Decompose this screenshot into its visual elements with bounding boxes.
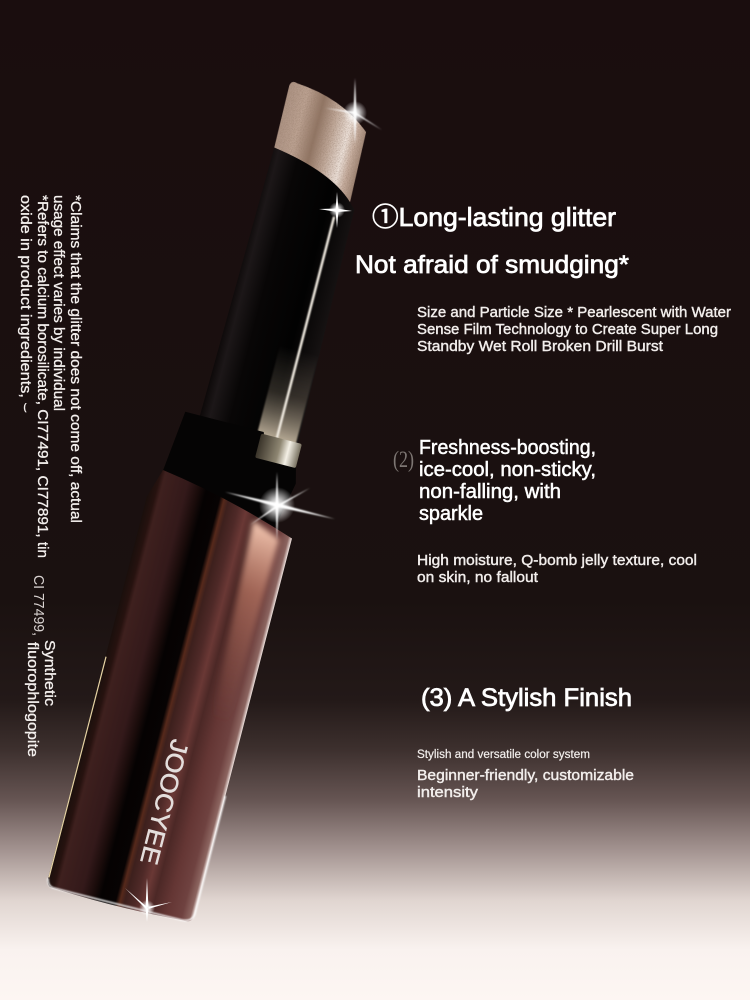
subheading: Stylish and versatile color system xyxy=(417,749,590,761)
body text: on skin, no fallout xyxy=(417,570,538,586)
sparkle: collar edge xyxy=(225,472,335,540)
heading xyxy=(419,437,596,525)
gold edge line xyxy=(48,657,107,878)
body xyxy=(46,468,300,926)
heading: (3) A Stylish Finish xyxy=(421,684,632,712)
heading: non-falling, with xyxy=(419,481,561,503)
line 7: fluorophlogopite xyxy=(24,642,41,757)
body text: Size and Particle Size * Pearlescent with Water xyxy=(417,305,731,321)
feature 1 xyxy=(355,202,731,355)
product: lipstick-shaped glitter stick xyxy=(46,72,403,926)
line 1: *Claims that the glitter does not come off, actual xyxy=(67,195,84,523)
body text xyxy=(417,553,697,586)
heading line 2: Not afraid of smudging* xyxy=(355,251,629,279)
body text: Standby Wet Roll Broken Drill Burst xyxy=(417,339,663,355)
footnote: vertical disclaimer text xyxy=(17,195,84,757)
line 3: *Refers to calcium borosilicate, CI77491, CI77891, tin xyxy=(34,195,51,558)
body text xyxy=(417,305,731,355)
line 2: usage effect varies by individual xyxy=(50,195,67,411)
sparkle: bullet tip xyxy=(325,78,382,145)
brand: JOOCYEE: JOOCYEE xyxy=(134,736,194,867)
feature 3 xyxy=(417,684,634,801)
body text: intensity xyxy=(417,785,479,801)
body text: Sense Film Technology to Create Super Long xyxy=(417,322,718,338)
body bottom rim xyxy=(46,758,225,924)
heading line 1: ①Long-lasting glitter xyxy=(372,202,616,232)
feature 2 xyxy=(393,437,697,586)
body text: High moisture, Q-bomb jelly texture, cool xyxy=(417,553,697,569)
inner tube xyxy=(198,146,368,448)
metal ring xyxy=(255,433,302,468)
heading: sparkle xyxy=(419,503,483,525)
body text: Beginner-friendly, customizable xyxy=(417,768,634,784)
sparkle: tube top xyxy=(319,192,352,228)
tube highlight xyxy=(274,216,335,445)
line 5: CI 77499, xyxy=(30,575,47,636)
sparkle: base xyxy=(125,878,172,922)
bullet xyxy=(265,81,376,202)
copper highlight xyxy=(202,520,282,725)
inner tube lower reflection xyxy=(257,345,319,444)
line 4: oxide in product ingredients, ⌣ xyxy=(17,195,34,413)
collar xyxy=(155,410,306,534)
body text xyxy=(417,768,634,801)
heading: Freshness-boosting, xyxy=(419,437,596,459)
number: (2) xyxy=(393,447,414,472)
heading: ice-cool, non-sticky, xyxy=(419,459,596,481)
line 6: Synthetic xyxy=(41,640,58,707)
